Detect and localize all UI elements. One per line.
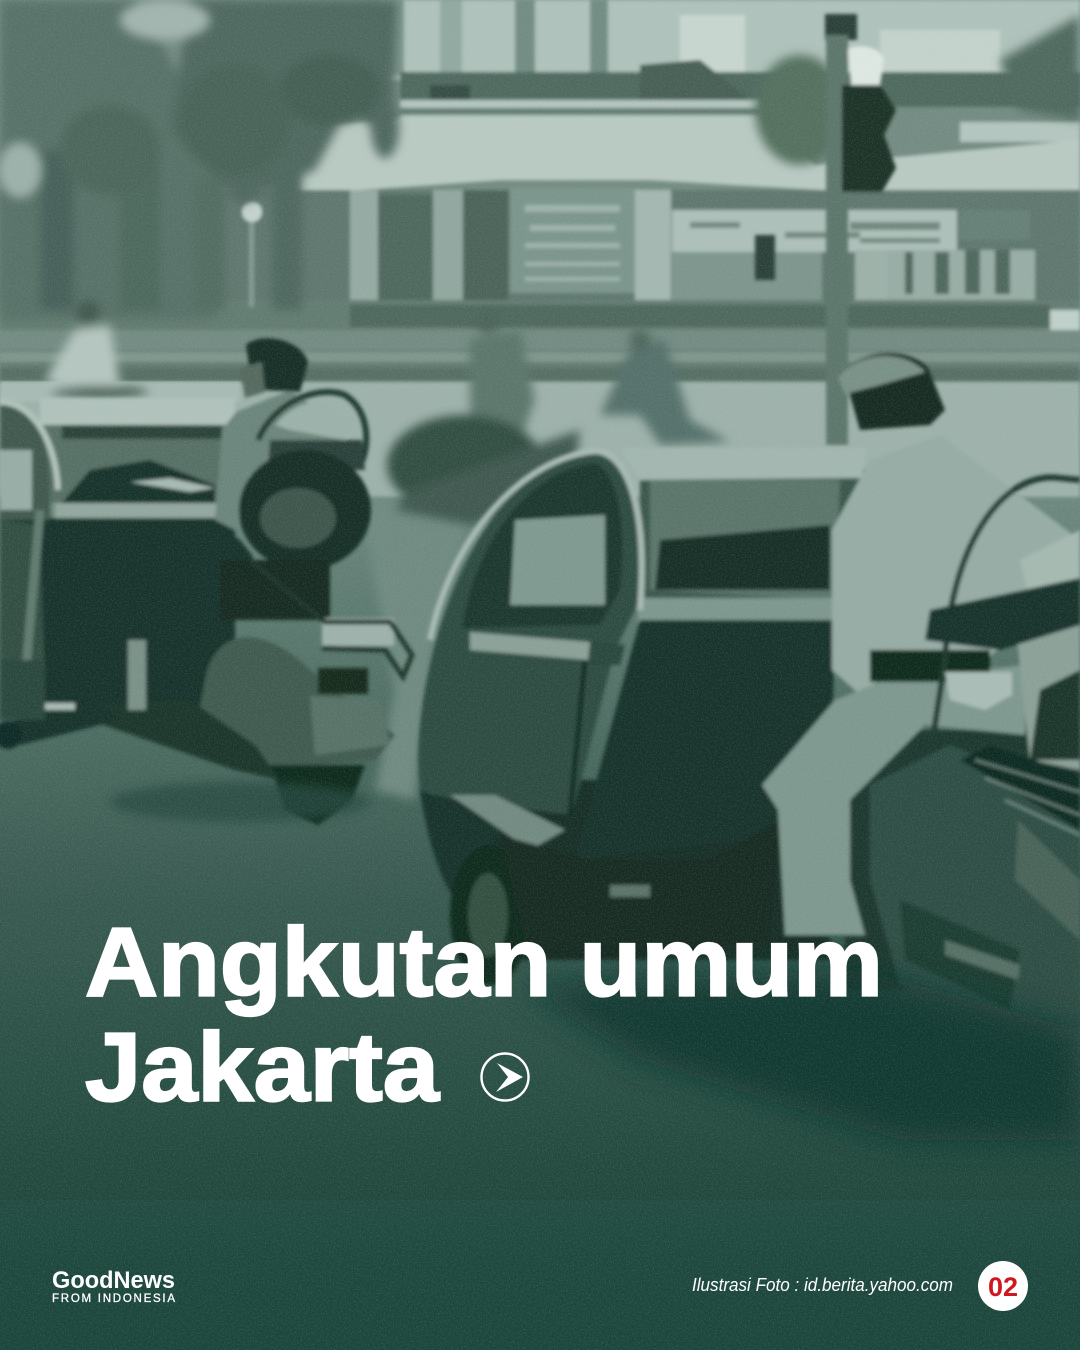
logo: GoodNews from Indonesia: GoodNews: [52, 1267, 175, 1294]
rear wheel: [270, 765, 365, 825]
right rack arch: [925, 477, 1080, 790]
scooter body: [195, 637, 395, 772]
rack: [322, 618, 394, 646]
gradient fade over vehicles: [0, 960, 1080, 1200]
front wheel: [450, 845, 530, 985]
right scooter: [870, 745, 1080, 1030]
photo: road band: [0, 382, 1080, 497]
door: [418, 450, 641, 815]
rider leg: [1015, 610, 1080, 770]
page number badge: [978, 1261, 1028, 1311]
rear rack arch: [258, 392, 366, 462]
title: Jakarta: [85, 1012, 440, 1122]
logo: GoodNews from Indonesia: FROM INDONESIA: [52, 1293, 175, 1305]
photo: dark shadow under vehicles: [520, 970, 1080, 1140]
photo: road between bajaj: [360, 500, 470, 800]
photo: traffic light pole: [755, 14, 896, 445]
photo: right bajaj: [418, 353, 1080, 1030]
photo: left bajaj: [0, 338, 412, 825]
photo: sky patch: [120, 0, 210, 40]
photo: shadow below left scooter: [110, 782, 370, 822]
photo: blurred cyclists: [45, 300, 730, 525]
title: Angkutan umum: [85, 908, 883, 1016]
driver: [832, 435, 1080, 695]
photo: palm trees: [0, 0, 1080, 320]
trousers: [762, 665, 1025, 935]
page number badge: 02: [988, 1272, 1018, 1302]
photo: upper building: [0, 0, 1080, 382]
right dark fill: [845, 730, 1080, 990]
driver: [215, 390, 345, 530]
spare tyre: [239, 450, 371, 570]
title: [85, 908, 883, 1122]
photo credit: Ilustrasi Foto : id.berita.yahoo.com: [692, 1275, 953, 1295]
icon: arrow in circle: [482, 1054, 528, 1100]
